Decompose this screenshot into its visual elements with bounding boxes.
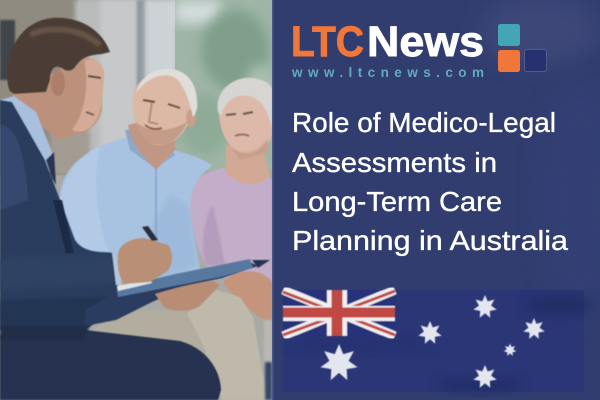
union jack canton <box>283 290 395 336</box>
flag stars <box>320 295 545 388</box>
title: Role of Medico-Legal <box>292 107 556 138</box>
advisor's writing hand <box>118 238 172 284</box>
man's trousers <box>90 310 205 348</box>
man's hair <box>136 69 197 117</box>
title: Long-Term Care <box>292 186 502 217</box>
photo: advisor meeting with senior couple <box>0 0 274 400</box>
title <box>292 107 568 256</box>
woman's neck <box>226 145 270 184</box>
flag field <box>283 290 595 393</box>
woman's hair <box>218 78 272 128</box>
woman's jumper <box>190 168 272 282</box>
logo url: www.ltcnews.com <box>291 65 484 80</box>
logo: LTCNews wordmark <box>291 18 484 80</box>
senior man <box>60 69 272 400</box>
man's head <box>133 70 192 145</box>
man's shirt <box>60 138 212 285</box>
title: Assessments in <box>292 147 497 178</box>
senior woman <box>188 78 272 322</box>
Australian flag <box>283 290 595 393</box>
advisor's navy suit <box>0 100 118 330</box>
icon: logo squares <box>498 24 546 72</box>
woman's face <box>218 95 272 153</box>
teal square <box>498 24 520 46</box>
folder <box>85 262 258 326</box>
man's neck <box>128 123 176 170</box>
advisor's trousers <box>0 330 221 400</box>
advisor's neck and face <box>10 58 104 140</box>
logo text: LTC: LTC <box>291 18 364 66</box>
navy square <box>524 50 546 72</box>
orange square <box>498 50 520 72</box>
woman's clasped hands <box>224 271 272 322</box>
logo text: News: News <box>367 18 484 66</box>
panel: navy right background <box>272 0 600 400</box>
advisor with suit, folder and pen <box>0 18 270 400</box>
pen <box>142 226 158 241</box>
advisor's shirt collar and tie <box>0 96 52 172</box>
title: Planning in Australia <box>292 225 568 256</box>
room background wall, curtains and window <box>0 0 274 400</box>
advisor's shirt cuff <box>112 252 122 285</box>
man's hand under folder <box>155 281 220 311</box>
advisor's hair <box>7 18 110 94</box>
